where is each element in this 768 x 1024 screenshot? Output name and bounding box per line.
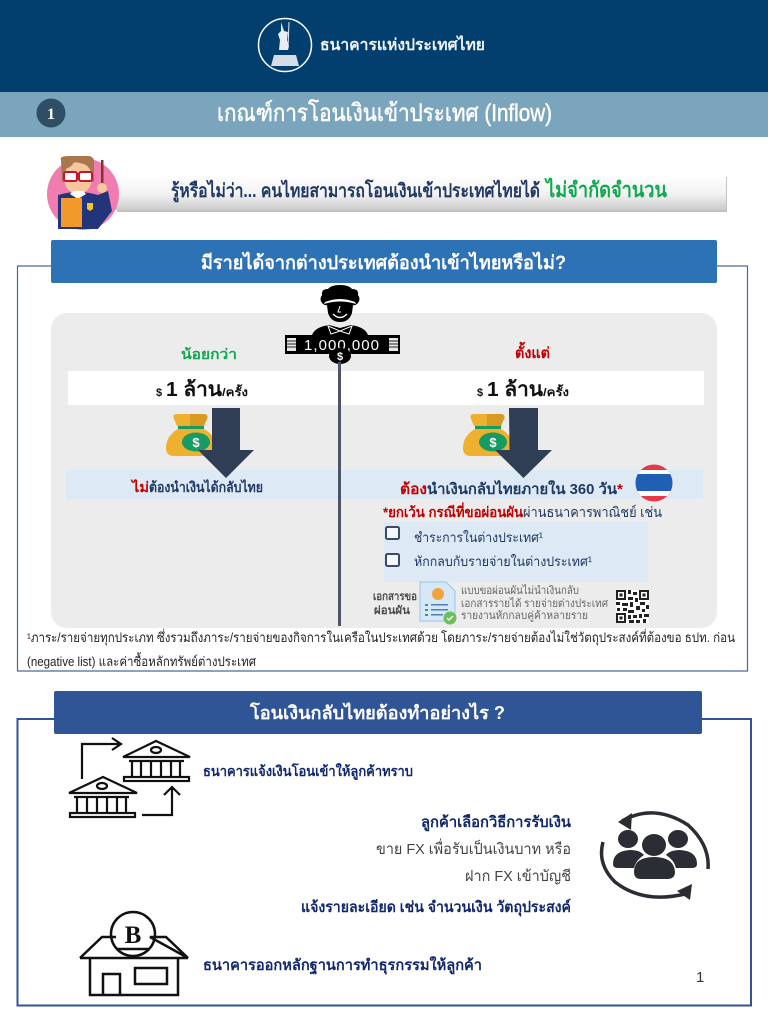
icon: thai flag (635, 464, 673, 502)
right column: from (373, 341, 673, 624)
amount left: $ (156, 387, 162, 399)
panel heading (54, 691, 702, 734)
documents list: เอกสารรายได้ รายจ่ายต่างประเทศ (461, 597, 608, 610)
exception note: ผ่านธนาคารพาณิชย์ เช่น (523, 504, 662, 520)
divider line (338, 362, 341, 626)
documents list (461, 584, 608, 622)
header band with logo (0, 0, 768, 92)
icon: customers cycle (602, 813, 708, 900)
panel heading: โอนเงินกลับไทยต้องทำอย่างไร ? (249, 702, 505, 723)
amount left (156, 378, 248, 401)
result right: * (617, 481, 623, 498)
white threshold row (68, 371, 704, 405)
exception note (383, 502, 662, 520)
step 2 option 1: ขาย FX เพื่อรับเป็นเงินบาท หรือ (376, 838, 571, 858)
icon: bitcoin bank house: B (125, 922, 141, 949)
documents label (373, 591, 417, 617)
step 2 option 2: ฝาก FX เข้าบัญชี (465, 868, 571, 885)
section number badge (36, 98, 66, 128)
icon: person holding 1,000,000 banner: $ (337, 351, 343, 363)
panel heading (51, 240, 717, 283)
callout text: รู้หรือไม่ว่า... คนไทยสามารถโอนเงินเข้าประเทศไทยได้ (171, 179, 540, 203)
footnote (27, 629, 735, 669)
icon: bitcoin bank house (80, 912, 188, 995)
panel: how to transfer (18, 691, 751, 1006)
step 4 text: ธนาคารออกหลักฐานการทำธุรกรรมให้ลูกค้า (203, 956, 482, 975)
footnote: (negative list) และค่าซื้อหลักทรัพย์ต่างประเทศ (27, 652, 257, 669)
icon: person holding 1,000,000 banner (285, 285, 400, 364)
documents label: เอกสารขอ (373, 591, 417, 603)
amount right (477, 378, 569, 401)
result left: ต้องนำเงินได้กลับไทย (149, 478, 263, 495)
exception item 2: หักกลบกับรายจ่ายในต่างประเทศ¹ (414, 553, 592, 569)
icon: qr code (616, 590, 649, 623)
blue exceptions box (384, 522, 648, 582)
step 2 heading: ลูกค้าเลือกวิธีการรับเงิน (421, 813, 572, 832)
result left: ไม่ (130, 478, 149, 495)
blue result band (66, 470, 703, 499)
step 3 text: แจ้งรายละเอียด เช่น จำนวนเงิน วัตถุประสงค์ (301, 898, 571, 917)
label less than: น้อยกว่า (181, 346, 237, 362)
arrow right (495, 408, 552, 478)
panel: income frame (18, 240, 748, 671)
icon: document (420, 582, 456, 624)
banner amount: 1,000,000 (304, 337, 379, 354)
result right: นำเงินกลับไทยภายใน 360 วัน (427, 479, 618, 498)
amount right: $ (477, 387, 483, 399)
amount left: 1 ล้าน (166, 378, 222, 401)
arrow left (198, 408, 254, 478)
exception item 1 (386, 527, 543, 545)
documents list: แบบขอผ่อนผันไม่นำเงินกลับ (461, 584, 579, 597)
exception item 1: ชำระการในต่างประเทศ¹ (414, 529, 543, 545)
left column: less than (130, 346, 263, 495)
result right: ต้อง (400, 481, 427, 498)
amount right: /ครั้ง (543, 384, 569, 399)
icon: banks transfer (69, 738, 190, 817)
documents list: รายงานหักกลบคู่ค้าหลายราย (461, 610, 588, 622)
page number: 1 (696, 969, 704, 986)
section number badge: 1 (47, 106, 55, 123)
exception note: *ยกเว้น กรณีที่ขอผ่อนผัน (383, 502, 523, 520)
documents label: ผ่อนผัน (374, 604, 410, 617)
logo emblem (258, 18, 312, 72)
icon: teacher (47, 156, 119, 230)
panel heading: มีรายได้จากต่างประเทศต้องนำเข้าไทยหรือไม่? (201, 251, 566, 274)
label from: ตั้งแต่ (515, 341, 550, 362)
grey comparison card (51, 313, 717, 628)
bank name: ธนาคารแห่งประเทศไทย (320, 35, 485, 54)
step 1 text: ธนาคารแจ้งเงินโอนเข้าให้ลูกค้าทราบ (203, 762, 413, 780)
amount right: 1 ล้าน (487, 378, 543, 401)
callout highlight: ไม่จำกัดจำนวน (544, 177, 668, 202)
page title: เกณฑ์การโอนเงินเข้าประเทศ (Inflow) (217, 99, 552, 127)
icon: money bag left: $ (192, 435, 200, 450)
icon: money bag right (463, 414, 513, 456)
icon: money bag left (166, 414, 216, 456)
amount left: /ครั้ง (222, 384, 248, 399)
icon: money bag right: $ (489, 435, 497, 450)
callout bar (115, 175, 727, 212)
title band (0, 92, 768, 137)
